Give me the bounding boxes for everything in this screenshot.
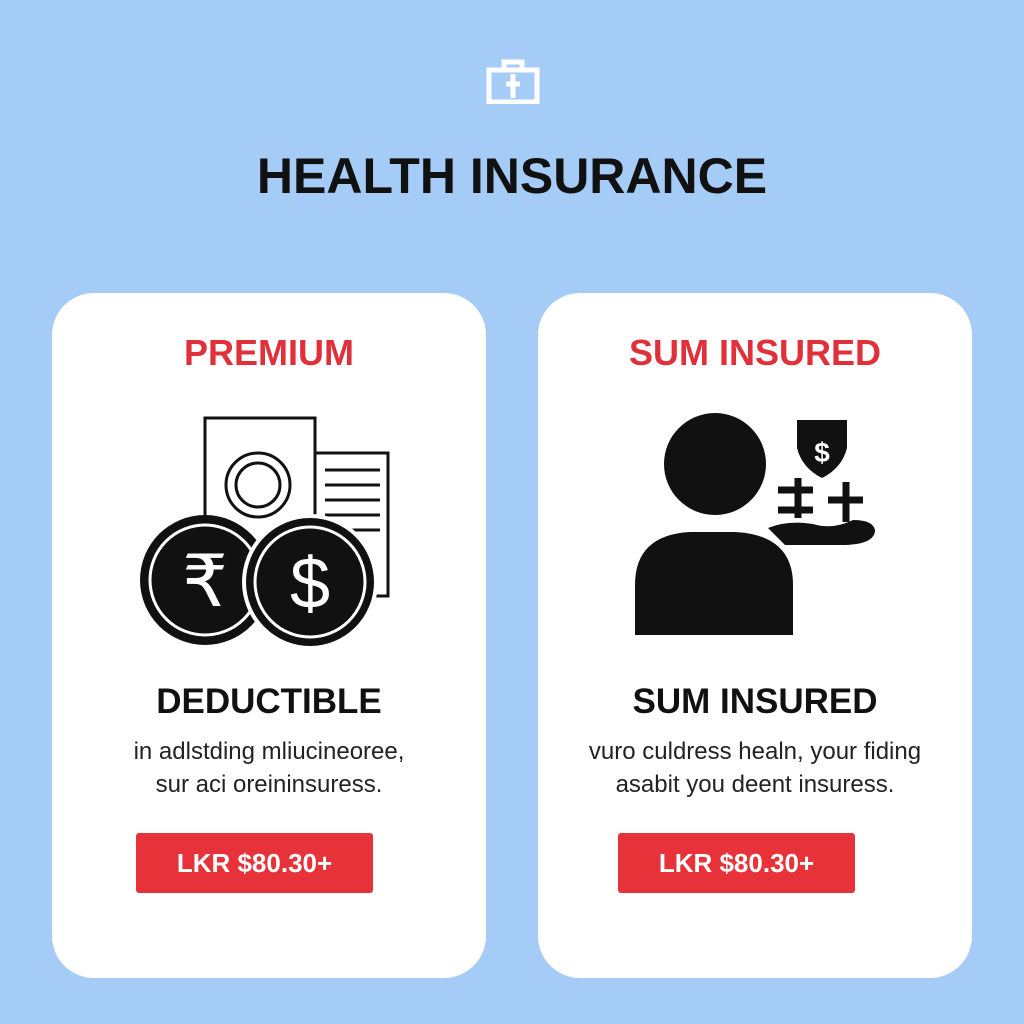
heading: deductible: DEDUCTIBLE bbox=[156, 682, 382, 721]
text: deductible body: sur aci oreininsuress. bbox=[156, 771, 382, 798]
panel: premium bbox=[52, 293, 486, 978]
text: sum insured body: asabit you deent insuress. bbox=[616, 771, 894, 798]
panel heading: sum insured: SUM INSURED bbox=[629, 332, 881, 373]
panel: sum insured bbox=[538, 293, 972, 978]
title: HEALTH INSURANCE bbox=[257, 148, 767, 204]
icon: documents and coins: ₹ bbox=[182, 539, 228, 623]
icon: person with shield bbox=[635, 413, 875, 635]
text: deductible body bbox=[134, 738, 404, 798]
text: deductible body: in adlstding mliucineoree, bbox=[134, 738, 404, 765]
button: premium price: LKR $80.30+ bbox=[177, 848, 332, 878]
icon: top bag bbox=[486, 60, 540, 104]
heading: sum insured: SUM INSURED bbox=[632, 682, 878, 721]
button: premium price bbox=[136, 833, 373, 893]
button: sum insured price: LKR $80.30+ bbox=[659, 848, 814, 878]
text: sum insured body bbox=[589, 738, 921, 798]
text: sum insured body: vuro culdress healn, your fiding bbox=[589, 738, 921, 765]
icon: documents and coins: $ bbox=[290, 544, 330, 624]
panel heading: premium: PREMIUM bbox=[184, 332, 354, 373]
button: sum insured price bbox=[618, 833, 855, 893]
icon: person with shield: $ bbox=[814, 437, 830, 468]
icon: documents and coins bbox=[140, 416, 390, 646]
